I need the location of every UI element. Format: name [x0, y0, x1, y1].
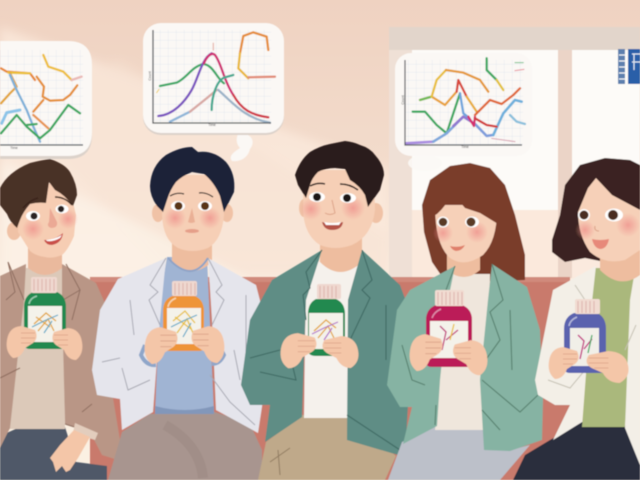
neck [28, 245, 62, 275]
x axis label: Time [208, 123, 216, 127]
eyes [578, 209, 590, 221]
trousers [108, 412, 262, 480]
collar [168, 258, 208, 271]
white coat [535, 264, 640, 465]
t-shirt [155, 257, 214, 414]
t-shirt [304, 262, 362, 418]
neck [320, 235, 362, 272]
person 4: woman in mint jacket [387, 163, 543, 480]
mouth [592, 239, 609, 249]
jacket [387, 264, 543, 451]
right hand [322, 336, 358, 368]
person 2: man in white coat and blue shirt [92, 147, 265, 480]
trousers [258, 415, 396, 480]
head [552, 158, 640, 281]
neck [447, 250, 480, 277]
shirt [9, 268, 65, 429]
nose [48, 208, 57, 228]
eyes [309, 192, 325, 202]
eyes [437, 216, 449, 228]
blazer [0, 264, 121, 460]
bottle: orange [163, 281, 204, 351]
window with frame and panes [389, 27, 640, 278]
chart lines [1, 55, 82, 142]
nose [595, 226, 599, 231]
fringe [430, 170, 502, 224]
left hand [281, 333, 317, 368]
hair [150, 147, 234, 212]
left hand [410, 334, 443, 371]
mouth [322, 222, 343, 230]
sofa back [90, 277, 570, 480]
bottle: green [308, 284, 345, 356]
head [430, 170, 502, 262]
left hand [7, 326, 37, 358]
nose [188, 208, 195, 223]
right hand [587, 351, 629, 383]
eyes [26, 211, 40, 221]
bottle: magenta [426, 290, 472, 367]
lips [450, 245, 465, 251]
thought bubble 1 with line chart [0, 41, 92, 159]
right hand [191, 326, 224, 363]
x axis label: Time [461, 145, 469, 149]
y axis label: Count [401, 95, 405, 105]
bottle: blue [564, 299, 606, 373]
trousers [388, 425, 530, 480]
head [295, 141, 384, 248]
dark trousers [513, 422, 640, 480]
right hand [453, 340, 487, 375]
neck [172, 235, 212, 271]
t-shirt [435, 274, 490, 430]
chart lines [406, 58, 525, 143]
eyes [171, 201, 185, 211]
hair [0, 159, 77, 228]
right hand [52, 328, 82, 360]
white coat [92, 258, 265, 433]
y axis label: Count [148, 71, 152, 81]
long hair behind [422, 163, 525, 281]
thought bubble 2 with bell curve chart [143, 23, 284, 161]
person 5: woman in white coat and olive shirt [513, 158, 640, 480]
bottle: green [24, 277, 66, 349]
left hand [145, 327, 178, 364]
axes [153, 30, 271, 123]
back hair [552, 158, 640, 262]
cuffs [141, 345, 224, 365]
chart lines [157, 32, 275, 123]
left hand [549, 347, 579, 379]
mouth [44, 233, 63, 245]
mouth [185, 229, 199, 233]
head [0, 159, 78, 258]
axis [0, 144, 83, 146]
person 1: man in brown blazer [0, 159, 121, 480]
olive shirt [582, 268, 636, 427]
nose [325, 200, 335, 214]
head [150, 147, 234, 251]
hair [295, 141, 384, 207]
axes [405, 60, 522, 145]
jeans [0, 427, 107, 480]
neck [600, 250, 640, 281]
resting hand and cuff [50, 423, 98, 472]
jacket [241, 250, 413, 457]
person 3: man in teal jacket [241, 141, 413, 480]
thought bubble 3 with multi-line chart [395, 53, 532, 171]
sign: blue poster on window [618, 49, 640, 84]
x axis label: Time [10, 146, 18, 150]
face [578, 178, 640, 261]
